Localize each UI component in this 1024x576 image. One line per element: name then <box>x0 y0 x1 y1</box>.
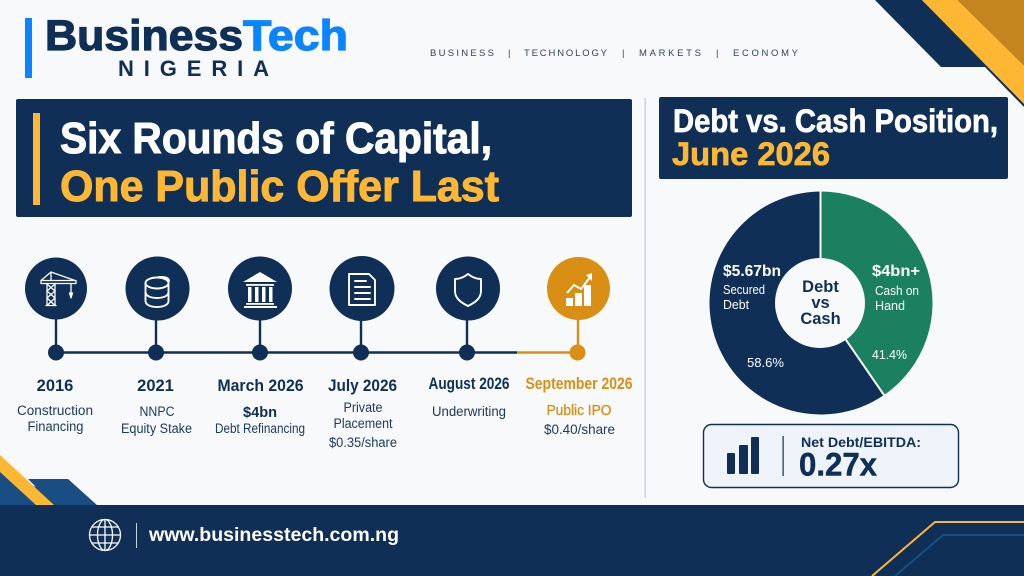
milestone: 2021: NNPC <box>140 404 175 419</box>
cash label: 41.4% <box>872 347 907 362</box>
logo: NIGERIA <box>118 56 269 81</box>
footer accent lines <box>872 522 1024 576</box>
navigation categories: MARKETS <box>639 48 701 59</box>
title panel <box>16 99 632 217</box>
milestone: July 2026: July 2026 <box>328 377 397 395</box>
logo: Tech <box>243 12 348 60</box>
slice: secured debt <box>710 192 884 414</box>
icon: construction crane <box>41 272 76 306</box>
centre label: Debt <box>802 278 839 296</box>
milestone: July 2026 <box>328 256 397 450</box>
title line 2: One Public Offer Last <box>60 162 499 211</box>
centre label <box>775 258 865 348</box>
milestone: March 2026 <box>215 256 305 436</box>
icon: rising chart <box>566 273 592 306</box>
milestone: 2016: 2016 <box>37 377 73 395</box>
debt label: $5.67bn <box>723 263 781 280</box>
cash label: $4bn+ <box>872 263 920 280</box>
navigation categories: | <box>716 48 718 59</box>
callout: net debt to EBITDA: 0.27x <box>799 446 877 482</box>
debt label <box>723 263 784 370</box>
donut chart <box>710 191 933 414</box>
icon: coin stack <box>146 277 169 307</box>
icon: document <box>349 274 375 305</box>
milestone: March 2026: March 2026 <box>218 377 304 395</box>
right panel heading: June 2026 <box>672 136 830 172</box>
navigation categories: | <box>508 48 510 59</box>
milestone: 2016: Financing <box>28 419 84 434</box>
cash label <box>872 263 920 362</box>
milestone: September 2026: $0.40/share <box>544 422 615 437</box>
icon: bars <box>727 437 759 474</box>
navigation categories: | <box>622 48 624 59</box>
timeline <box>17 256 632 450</box>
footer bar <box>0 505 1024 576</box>
logo <box>25 12 348 81</box>
milestone: July 2026: Placement <box>334 416 393 431</box>
icon: bank building <box>243 272 277 308</box>
timeline axis <box>56 351 578 354</box>
debt label: Secured <box>723 282 765 297</box>
milestone: 2021: Equity Stake <box>121 421 192 436</box>
navigation categories <box>430 48 799 59</box>
milestone: 2016 <box>17 258 93 434</box>
icon: shield <box>455 274 481 306</box>
milestone: July 2026: Private <box>344 400 382 415</box>
navigation categories: TECHNOLOGY <box>524 48 608 59</box>
cash label: Cash on <box>875 283 919 298</box>
icon: globe <box>90 520 120 550</box>
right panel heading: Debt vs. Cash Position, <box>673 103 998 139</box>
milestone: 2021: 2021 <box>137 377 174 395</box>
milestone: 2016: Construction <box>17 403 93 418</box>
centre label: Cash <box>800 310 841 328</box>
top-right corner decoration <box>875 0 1024 107</box>
milestone: September 2026: September 2026 <box>526 375 632 393</box>
milestone: 2021 <box>121 256 192 436</box>
cash label: Hand <box>875 298 905 313</box>
milestone: September 2026: Public IPO <box>546 402 612 419</box>
callout: net debt to EBITDA: Net Debt/EBITDA: <box>801 434 921 450</box>
debt label: 58.6% <box>747 355 784 370</box>
callout: net debt to EBITDA <box>704 424 958 488</box>
milestone: July 2026: $0.35/share <box>329 435 397 450</box>
milestone: August 2026: Underwriting <box>432 404 506 419</box>
milestone: August 2026 <box>428 256 510 419</box>
right panel heading <box>659 97 1008 179</box>
debt label: Debt <box>723 297 749 312</box>
milestone: March 2026: Debt Refinancing <box>215 421 305 436</box>
centre label: vs <box>811 294 830 312</box>
bottom-left corner decoration <box>0 455 97 505</box>
navigation categories: ECONOMY <box>733 48 799 59</box>
logo: Business <box>45 12 243 60</box>
title line 1: Six Rounds of Capital, <box>60 114 492 163</box>
milestone: September 2026 <box>526 257 632 437</box>
milestone: August 2026: August 2026 <box>428 375 510 393</box>
navigation categories: BUSINESS <box>430 48 494 59</box>
milestone: March 2026: $4bn <box>243 405 277 421</box>
website address: www.businesstech.com.ng <box>148 524 399 546</box>
slice: cash on hand <box>820 191 933 395</box>
